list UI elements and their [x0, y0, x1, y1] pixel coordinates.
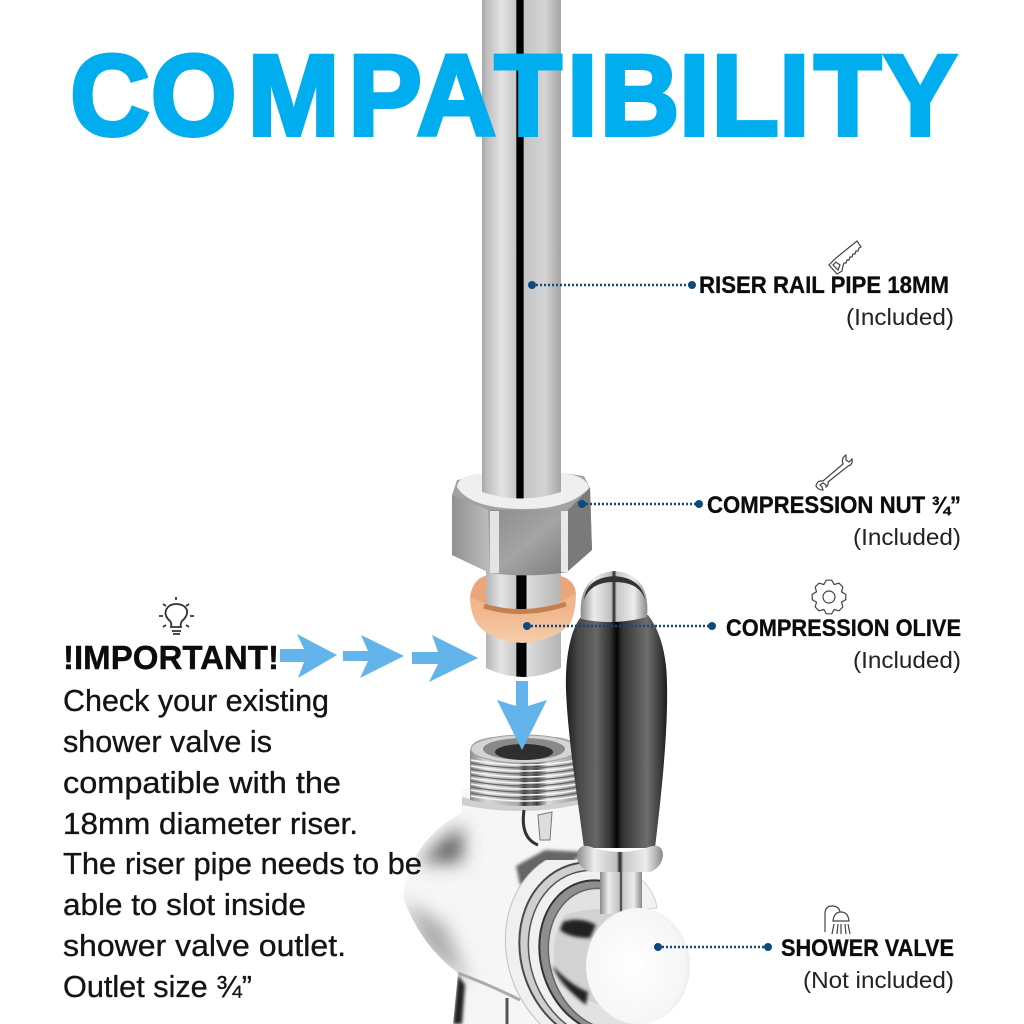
leader: shower valve [654, 943, 772, 951]
icon: wrench [816, 455, 852, 490]
valve shroud rings [504, 860, 640, 1024]
text: important note: compatible with the [63, 765, 341, 800]
text: important note: Check your existing [63, 683, 329, 718]
leader: compression olive [523, 622, 716, 630]
label: shower valve: SHOWER VALVE [781, 935, 954, 962]
text: important note: The riser pipe needs to be [63, 846, 422, 881]
riser rail pipe [482, 0, 561, 498]
label: compression olive: (Included) [853, 647, 961, 673]
arrow: down [497, 681, 547, 750]
text: important note: shower valve outlet. [63, 928, 346, 963]
icon: shower [825, 906, 850, 934]
title: COMPATIBILITY [70, 31, 957, 159]
lever handle [566, 571, 667, 872]
icon: gear [812, 580, 846, 614]
heading: important: !IMPORTANT! [63, 639, 279, 676]
label: riser rail pipe [699, 272, 954, 330]
valve stem [600, 868, 642, 914]
leader: riser rail pipe [528, 281, 696, 289]
label: compression olive: COMPRESSION OLIVE [726, 615, 961, 642]
text: important note: able to slot inside [63, 887, 306, 922]
valve thread [470, 735, 578, 806]
valve body [403, 788, 584, 1024]
arrow: right 1 [280, 634, 337, 678]
rear disc outline [640, 878, 657, 910]
label: shower valve: (Not included) [803, 967, 954, 993]
arrow: right 2 [343, 635, 404, 678]
compression nut [452, 472, 592, 575]
text: important note: shower valve is [63, 724, 272, 759]
icon: saw [829, 241, 861, 274]
text: important note: 18mm diameter riser. [63, 806, 358, 841]
text: important note: Outlet size ¾” [63, 969, 252, 1004]
label: riser rail pipe: (Included) [846, 304, 954, 330]
label: riser rail pipe: RISER RAIL PIPE 18MM [699, 272, 949, 299]
label: shower valve [781, 935, 954, 993]
label: compression nut: COMPRESSION NUT ¾” [707, 492, 961, 519]
label: compression olive [726, 615, 961, 673]
leader: compression nut [578, 500, 703, 508]
icon: light bulb [159, 597, 194, 634]
compression olive front band [470, 592, 576, 643]
label: compression nut: (Included) [853, 524, 961, 550]
valve knob disc [586, 908, 690, 1024]
label: compression nut [707, 492, 961, 550]
arrow: right 3 [412, 635, 478, 682]
lower pipe [486, 565, 561, 677]
text: important note [63, 683, 422, 1004]
compression olive rear rim [470, 575, 576, 612]
